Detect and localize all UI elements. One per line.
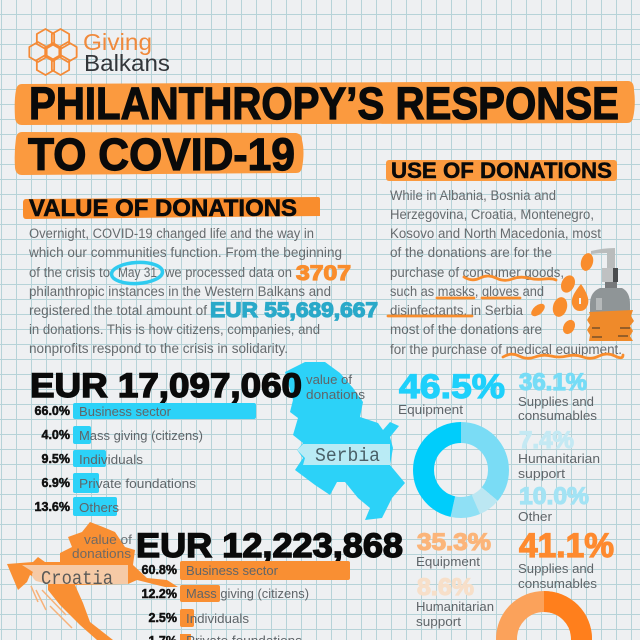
stat: 36.1% supplies: Supplies and [518, 394, 594, 409]
text block: use of donations: Kosovo and North Macedonia, most [390, 226, 601, 241]
panel: use of donations [386, 158, 634, 358]
title highlight line 1 [15, 81, 635, 125]
number: 3707: 3707 [296, 262, 351, 285]
bar chart: Croatia donors: Individuals [186, 611, 250, 626]
map: Croatia: Croatia [41, 568, 113, 590]
stat: 35.3% equipment [416, 529, 491, 569]
stat: 46.5% equipment: Equipment [398, 402, 463, 417]
bar chart: Serbia donors: Mass giving (citizens) [79, 428, 203, 443]
stat: 10.0% other [518, 483, 589, 524]
bar chart: Serbia donors [35, 403, 256, 516]
bar chart: Croatia donors: 60.8% [142, 563, 177, 577]
stat: 8.6% humanitarian: 8.6% [417, 574, 474, 601]
label: value of donations: value of [84, 532, 132, 547]
text block: use of donations: such as masks, gloves and [390, 284, 544, 299]
bar chart: Serbia donors: Private foundations [79, 476, 197, 491]
stat: 10.0% other: Other [518, 509, 553, 524]
stat: 35.3% equipment: Equipment [416, 554, 480, 569]
stat: 7.4% humanitarian: Humanitarian [518, 451, 600, 466]
bar chart: Serbia donors: 13.6% [35, 500, 70, 514]
stat: 8.6% humanitarian: support [416, 614, 461, 629]
text block: value of donations [28, 226, 342, 356]
bar chart: Serbia donors: Others [79, 500, 120, 515]
total: Serbia: EUR 17,097,060 [30, 367, 302, 405]
text block: use of donations [390, 188, 622, 357]
map: Serbia: Serbia [315, 445, 380, 467]
stat: 7.4% humanitarian: 7.4% [519, 427, 574, 454]
text block: use of donations: disinfectants, in Serbia [390, 303, 523, 318]
bar chart: Croatia donors: Mass giving (citizens) [186, 586, 309, 601]
bar chart: Croatia donors: 2.5% [148, 611, 177, 625]
text block: value of donations: registered the total amount of [29, 303, 207, 318]
text block: use of donations: purchase of consumer goods, [390, 265, 564, 280]
panel: Serbia [30, 362, 600, 524]
bar chart: Croatia donors [142, 561, 350, 640]
stat: 36.1% supplies: consumables [518, 408, 598, 423]
stat: 7.4% humanitarian [518, 427, 600, 481]
stat: 36.1% supplies [518, 369, 598, 423]
stat: 46.5% equipment [398, 368, 505, 417]
label: value of donations: value of [306, 372, 352, 387]
stat: 35.3% equipment: 35.3% [417, 529, 491, 556]
title text line 2: TO COVID-19 [28, 129, 295, 180]
logo wordmark: Balkans [84, 50, 170, 76]
map: Croatia [7, 522, 178, 640]
panel: value of donations [23, 195, 378, 356]
logo: Giving Balkans [29, 29, 170, 76]
panel: Croatia [7, 522, 614, 640]
text block: value of donations: May 31 [118, 265, 157, 280]
orange scribble on bottle [587, 310, 634, 341]
text block: value of donations: in donations. This is how citizens, companies, and [29, 322, 320, 337]
number: total amount: EUR 55,689,667 [210, 299, 378, 322]
title [15, 78, 635, 180]
text block: use of donations: most of the donations are [390, 322, 542, 337]
label: value of donations: donations [306, 387, 366, 402]
title highlight line 2 [15, 132, 304, 175]
text block: value of donations: which our communities function. From the beginning [28, 245, 342, 260]
donut chart: Croatia use [506, 602, 582, 640]
heading: use of donations: USE OF DONATIONS [391, 158, 612, 183]
text block: use of donations: While in Albania, Bosnia and [390, 188, 556, 203]
bar chart: Serbia donors: Individuals [79, 452, 144, 467]
bar chart: Serbia donors: 4.0% [42, 428, 70, 442]
stat: 8.6% humanitarian: Humanitarian [416, 599, 494, 614]
stat: 41.1% supplies [518, 527, 614, 591]
stat: 10.0% other: 10.0% [519, 483, 589, 510]
stat: 8.6% humanitarian [416, 574, 494, 629]
label: value of donations [72, 532, 132, 561]
bar chart: Croatia donors: 12.2% [142, 587, 177, 601]
stat: 36.1% supplies: 36.1% [519, 369, 587, 396]
text block: value of donations: we processed data on [164, 265, 292, 280]
label: value of donations: donations [72, 546, 132, 561]
bar chart: Croatia donors: Business sector [186, 563, 279, 578]
map: Serbia [285, 362, 405, 520]
text block: value of donations: philanthropic instances in the Western Balkans and [29, 284, 331, 299]
stat: 41.1% supplies: consumables [518, 576, 598, 591]
text block: use of donations: of the donations are for the [390, 245, 552, 260]
icon: sanitizer bottle [587, 248, 634, 341]
icon: soap drops [529, 252, 595, 336]
stat: 46.5% equipment: 46.5% [399, 368, 505, 406]
logo wordmark [83, 29, 170, 76]
bar chart: Serbia donors: 9.5% [42, 452, 70, 466]
bar chart: Serbia donors: 6.9% [42, 476, 70, 490]
stat: 7.4% humanitarian: support [518, 466, 565, 481]
heading: value of donations: VALUE OF DONATIONS [29, 195, 297, 222]
donut chart: Serbia use [424, 432, 498, 508]
text block: use of donations: Herzegovina, Croatia, Montenegro, [390, 207, 594, 222]
text block: use of donations: for the purchase of medical equipment. [390, 342, 622, 357]
logo wordmark: Giving [83, 29, 152, 55]
total: Croatia: EUR 12,223,868 [136, 527, 403, 565]
text block: value of donations: Overnight, COVID-19 changed life and the way in [29, 226, 314, 241]
underlines: highlighted phrases [388, 276, 623, 358]
bar chart: Serbia donors: 66.0% [35, 404, 70, 418]
callout: May 31 circle [111, 261, 163, 285]
stat: 41.1% supplies: 41.1% [519, 527, 614, 565]
bar chart: Serbia donors: Business sector [79, 404, 172, 419]
text block: value of donations: nonprofits respond to the crisis in solidarity. [29, 341, 288, 356]
stat: 41.1% supplies: Supplies and [518, 561, 594, 576]
text block: value of donations: of the crisis to [29, 265, 110, 280]
label: value of donations [306, 372, 366, 402]
icon: hexagon flower [29, 29, 77, 75]
